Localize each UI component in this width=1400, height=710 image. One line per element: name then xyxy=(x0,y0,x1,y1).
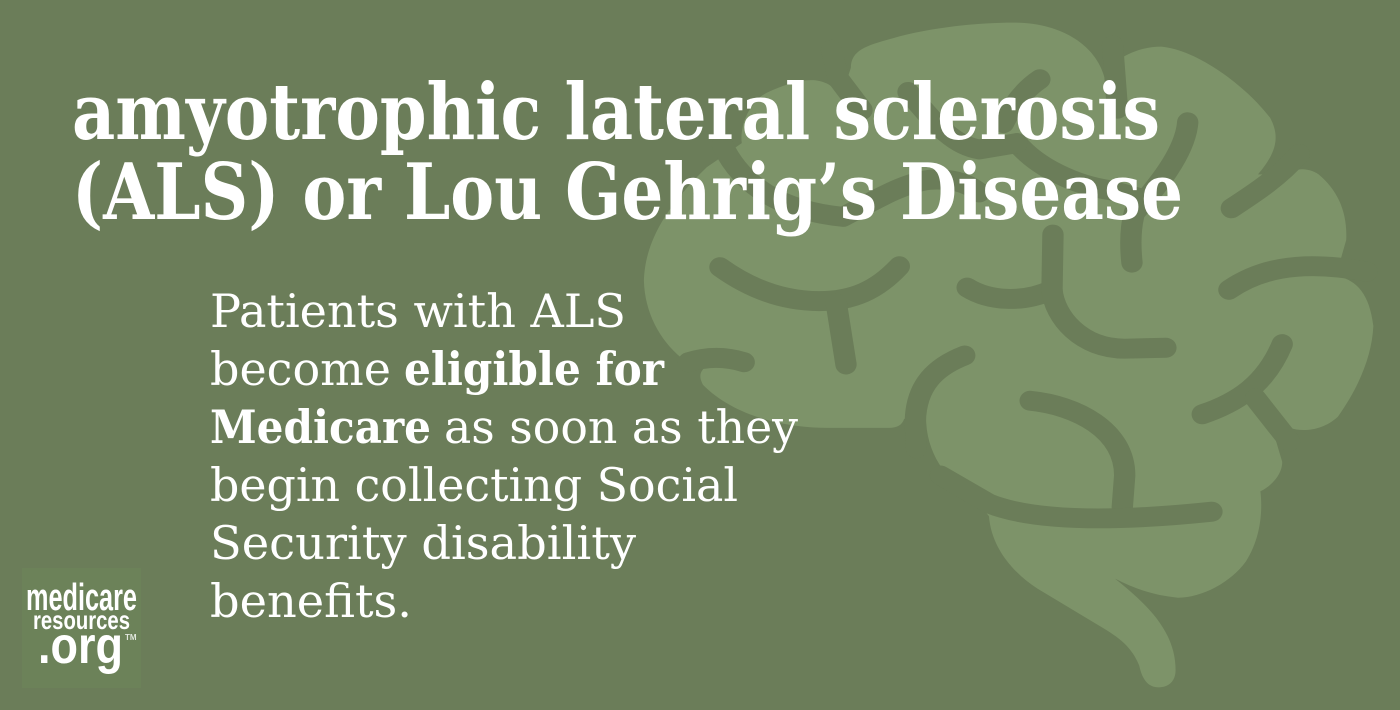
title: (ALS) or Lou Gehrig’s Disease xyxy=(72,147,1183,238)
logo: medicareresources.org: resources xyxy=(33,605,130,635)
text block: eligibility description: Patients with ALS xyxy=(210,284,626,338)
text block: eligibility description: Security disability xyxy=(210,516,636,570)
text block: eligibility description: as soon as they xyxy=(444,400,798,454)
icon: brain silhouette xyxy=(644,23,1373,687)
text block: eligibility description: Medicare xyxy=(210,400,431,454)
logo: medicareresources.org: medicare xyxy=(26,577,137,619)
logo: medicareresources.org: TM xyxy=(125,633,137,642)
text block: eligibility description: become xyxy=(210,342,391,396)
text block: eligibility description: begin collecting Social xyxy=(210,458,738,512)
text block: eligibility description xyxy=(210,284,798,628)
logo: medicareresources.org xyxy=(22,568,141,688)
text block: eligibility description: eligible for xyxy=(404,342,665,396)
title: amyotrophic lateral sclerosis xyxy=(72,67,1160,158)
logo: medicareresources.org: .org xyxy=(38,617,123,675)
text block: eligibility description: benefits. xyxy=(210,574,412,628)
title xyxy=(72,67,1183,238)
